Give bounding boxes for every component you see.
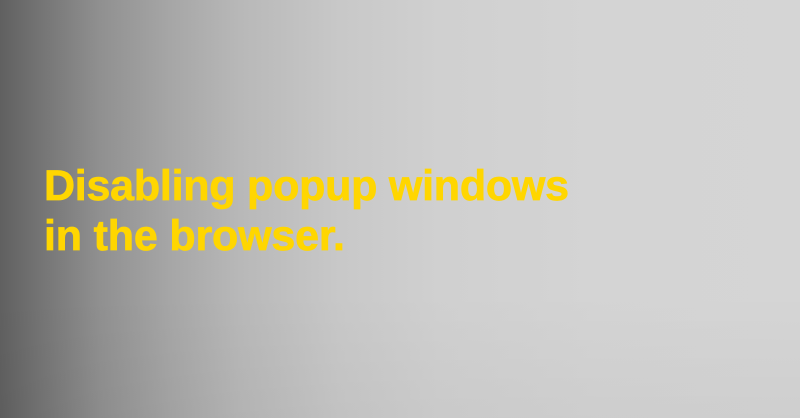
title: in the browser. — [44, 212, 345, 260]
title: Disabling popup windows — [44, 162, 569, 210]
